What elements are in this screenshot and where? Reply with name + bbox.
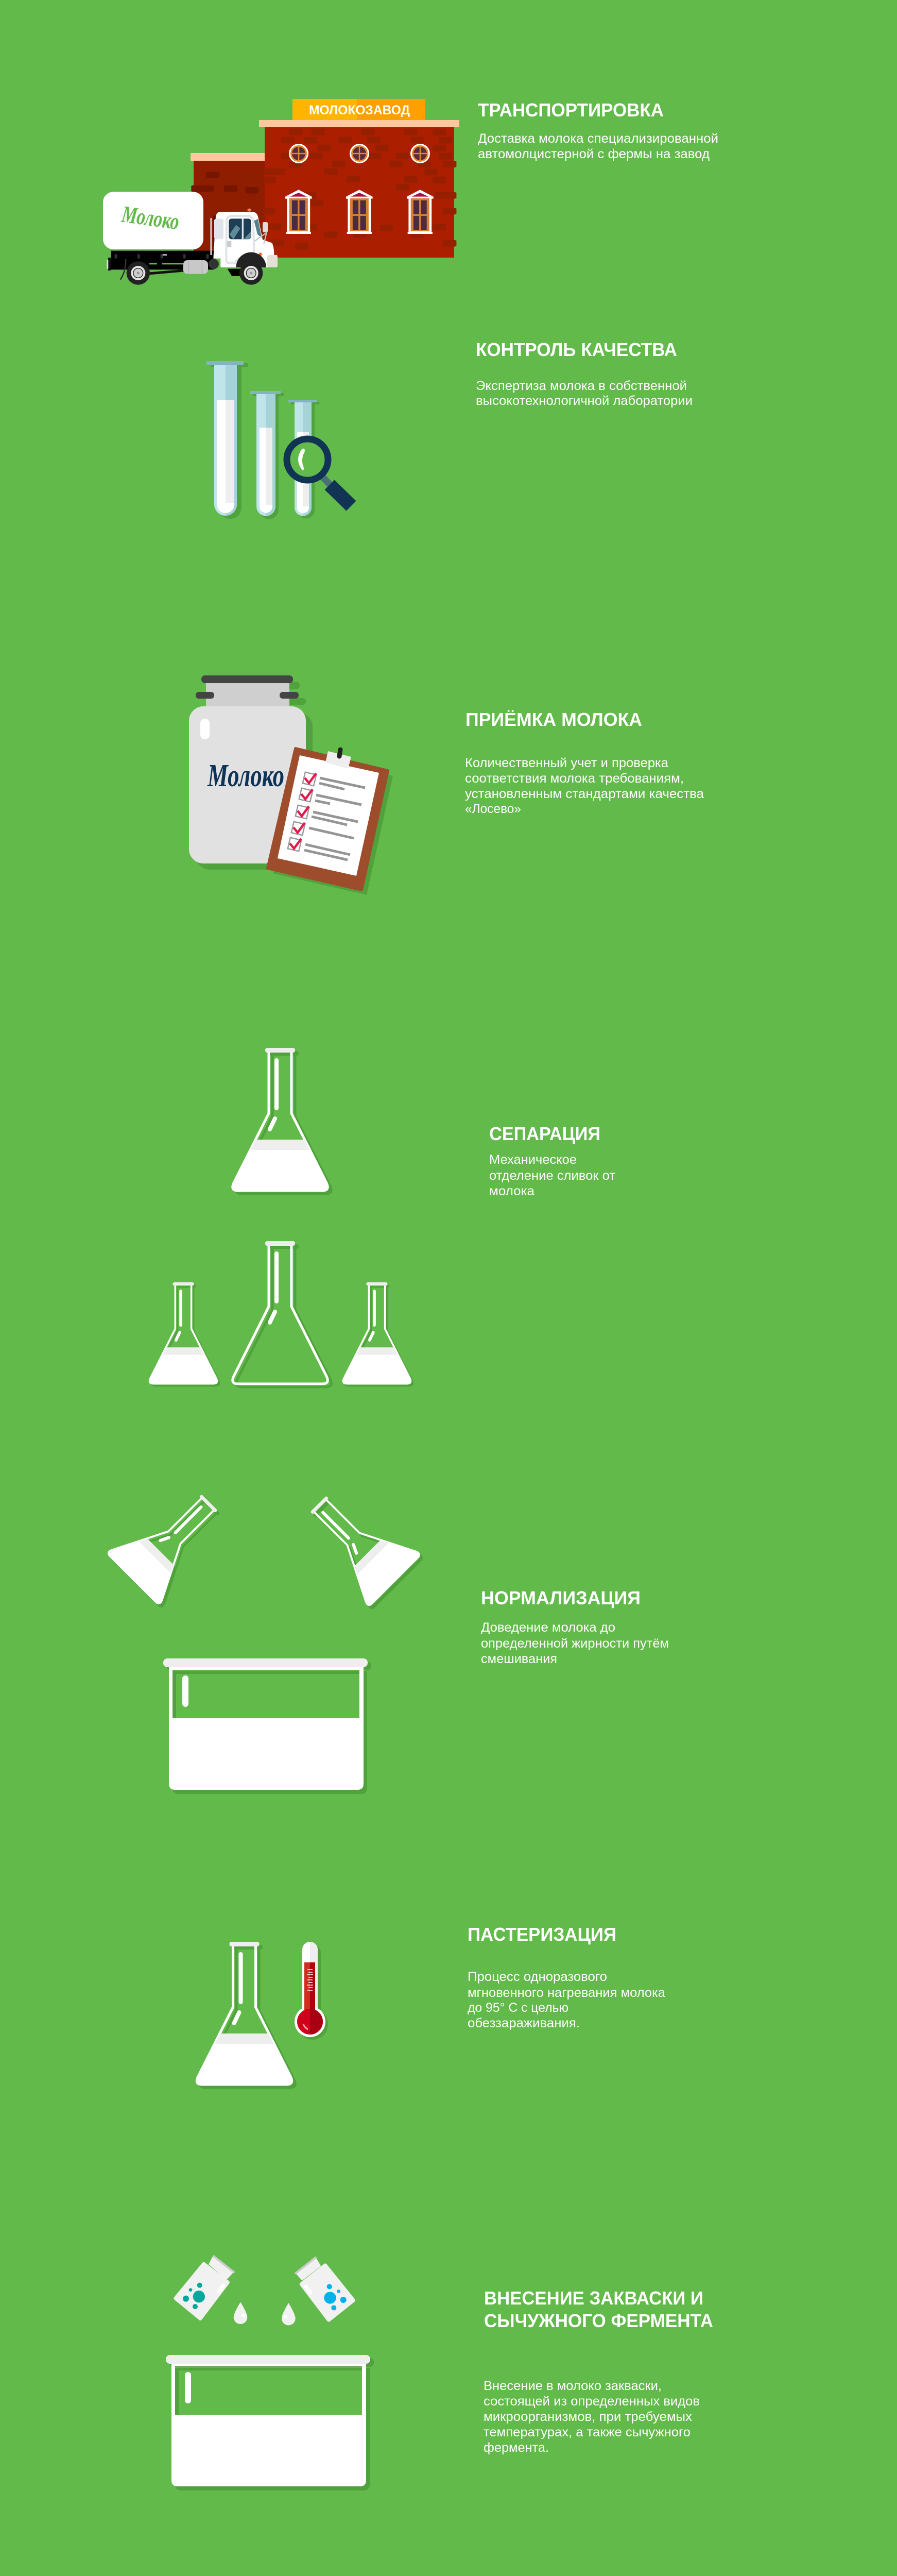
illustration: tilted flasks: [108, 1477, 423, 1609]
text: normalization description: [481, 1620, 669, 1666]
heading: starter and rennet: ВНЕСЕНИЕ ЗАКВАСКИ И: [484, 2287, 703, 2309]
text: pasteurization description: обеззараживания.: [468, 2016, 580, 2030]
illustration: beaker: [163, 1658, 371, 1794]
icon: drops: [234, 2302, 296, 2325]
illustration: test tubes: [206, 361, 319, 519]
text: transportation description: Доставка молока специализированной: [478, 131, 718, 146]
panel: adding starter and rennet: [166, 2256, 713, 2490]
text: milk intake description: «Лосево»: [465, 802, 521, 816]
icon: magnifying glass: [287, 439, 351, 506]
heading: transportation: ТРАНСПОРТИРОВКА: [478, 99, 664, 121]
text: transportation description: [478, 131, 718, 161]
text: starter description: Внесение в молоко закваски,: [484, 2379, 662, 2393]
icon: starter bottles and drops: [176, 2256, 354, 2325]
text: starter description: состоящей из определенных видов: [484, 2394, 700, 2409]
illustration: full flask: [233, 1048, 331, 1194]
text: milk intake description: соответствия молока требованиям,: [465, 771, 684, 786]
text: transportation description: автомолцистерной с фермы на завод: [478, 147, 710, 161]
text: milk intake description: Количественный учет и проверка: [465, 756, 668, 770]
text: normalization description: смешивания: [481, 1652, 557, 1666]
text: separation description: Механическое: [489, 1153, 577, 1167]
icon: clipboard checklist: [268, 749, 393, 895]
panel: quality control: [206, 339, 693, 519]
heading: milk intake: ПРИЁМКА МОЛОКА: [465, 709, 642, 730]
text: quality control description: высокотехнологичной лаборатории: [476, 394, 693, 408]
illustration: milk truck: [103, 192, 278, 285]
illustration: milk can: [189, 675, 313, 870]
text: pasteurization description: мгновенного нагревания молока: [468, 1986, 665, 2000]
heading: separation: СЕПАРАЦИЯ: [489, 1123, 600, 1144]
illustration: milk can: Молоко: [207, 758, 284, 793]
heading: starter and rennet: [484, 2287, 713, 2331]
panel: pasteurization: [197, 1924, 665, 2088]
heading: quality control: КОНТРОЛЬ КАЧЕСТВА: [476, 339, 677, 360]
panel: transportation: [103, 99, 718, 285]
heading: starter and rennet: СЫЧУЖНОГО ФЕРМЕНТА: [484, 2310, 713, 2331]
text: milk intake description: [465, 756, 704, 816]
illustration: flask: [197, 1942, 295, 2088]
panel: milk intake: [189, 675, 704, 895]
icon: thermometer: [295, 1942, 328, 2040]
text: milk intake description: установленным стандартами качества: [465, 787, 704, 801]
text: normalization description: определенной жирности путём: [481, 1636, 669, 1651]
text: quality control description: Экспертиза молока в собственной: [476, 379, 687, 393]
panel: separation: [150, 1048, 616, 1387]
text: starter description: [484, 2379, 700, 2455]
illustration: milk truck: Молоко: [120, 200, 181, 235]
illustration: three flasks: [150, 1241, 412, 1387]
heading: pasteurization: ПАСТЕРИЗАЦИЯ: [468, 1924, 616, 1945]
text: starter description: фермента.: [484, 2441, 549, 2455]
illustration: dairy factory: МОЛОКОЗАВОД: [309, 103, 410, 117]
text: pasteurization description: [468, 1970, 665, 2030]
text: separation description: [489, 1153, 616, 1198]
text: separation description: молока: [489, 1184, 534, 1198]
illustration: beaker: [166, 2355, 374, 2490]
text: pasteurization description: Процесс одноразового: [468, 1970, 607, 1984]
illustration: dairy factory: [191, 99, 459, 258]
icon: right bottle: [295, 2258, 354, 2320]
text: starter description: температурах, а также сычужного: [484, 2425, 691, 2439]
icon: left bottle: [176, 2256, 234, 2319]
text: quality control description: [476, 379, 693, 408]
heading: normalization: НОРМАЛИЗАЦИЯ: [481, 1587, 641, 1608]
text: separation description: отделение сливок от: [489, 1168, 616, 1183]
text: pasteurization description: до 95° С с целью: [468, 2001, 568, 2015]
panel: normalization: [108, 1477, 669, 1794]
text: normalization description: Доведение молока до: [481, 1620, 615, 1635]
text: starter description: микроорганизмов, при требуемых: [484, 2410, 693, 2424]
